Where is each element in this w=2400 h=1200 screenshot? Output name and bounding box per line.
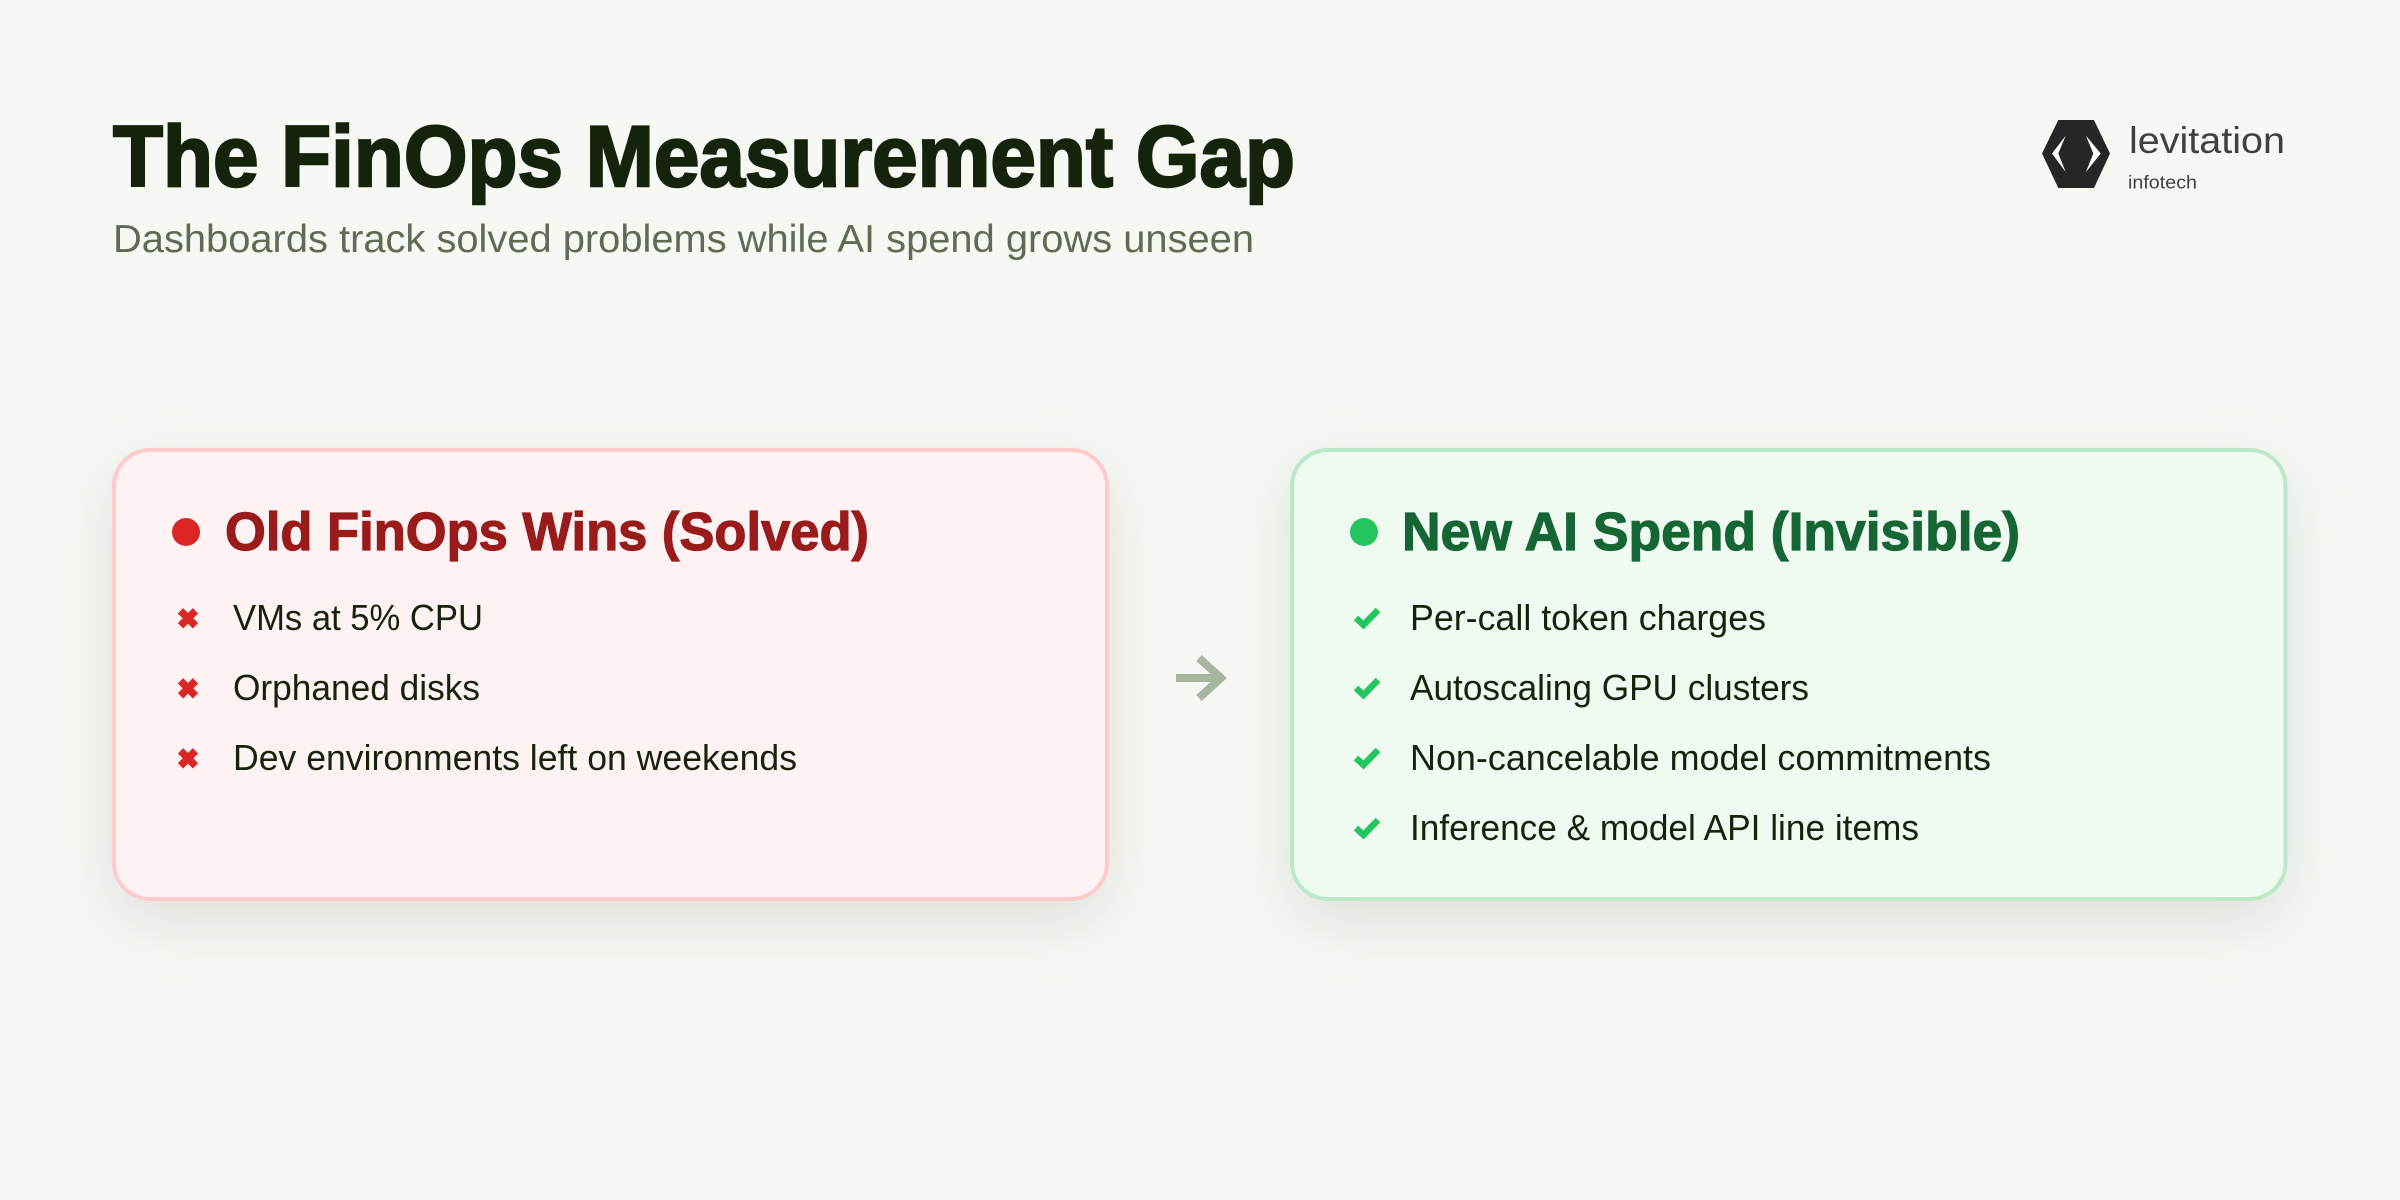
status dot: green [1350, 518, 1378, 546]
subtitle: Dashboards track solved problems while AI spend grows unseen [113, 218, 1254, 261]
status dot: red [172, 518, 200, 546]
list item: Per-call token charges [1410, 597, 1766, 638]
panel background [114, 450, 1107, 899]
list item: Non-cancelable model commitments [1410, 737, 1991, 778]
icon: cross [180, 611, 196, 626]
logo wordmark: levitation [2129, 120, 2285, 161]
panel: new AI spend [1292, 450, 2286, 899]
list item: VMs at 5% CPU [233, 597, 483, 638]
panel heading: Old FinOps Wins (Solved) [225, 502, 869, 562]
logo: levitation infotech [2042, 120, 2285, 192]
panel heading: New AI Spend (Invisible) [1402, 502, 2020, 562]
list item: Orphaned disks [233, 667, 480, 708]
icon: check [1356, 680, 1378, 695]
icon: cross [180, 681, 196, 696]
list item: Inference & model API line items [1410, 807, 1919, 848]
logo sub-wordmark: infotech [2128, 172, 2197, 192]
title: The FinOps Measurement Gap [113, 109, 1295, 205]
panel background [1292, 450, 2286, 899]
icon: hexagon logo mark [2042, 120, 2110, 188]
arrow [1176, 658, 1222, 698]
list item: Autoscaling GPU clusters [1410, 667, 1809, 708]
icon: check [1356, 750, 1378, 765]
icon: check [1356, 820, 1378, 835]
icon: check [1356, 610, 1378, 625]
list item: Dev environments left on weekends [233, 737, 797, 778]
icon: cross [180, 751, 196, 766]
panel: old FinOps wins [114, 450, 1107, 899]
